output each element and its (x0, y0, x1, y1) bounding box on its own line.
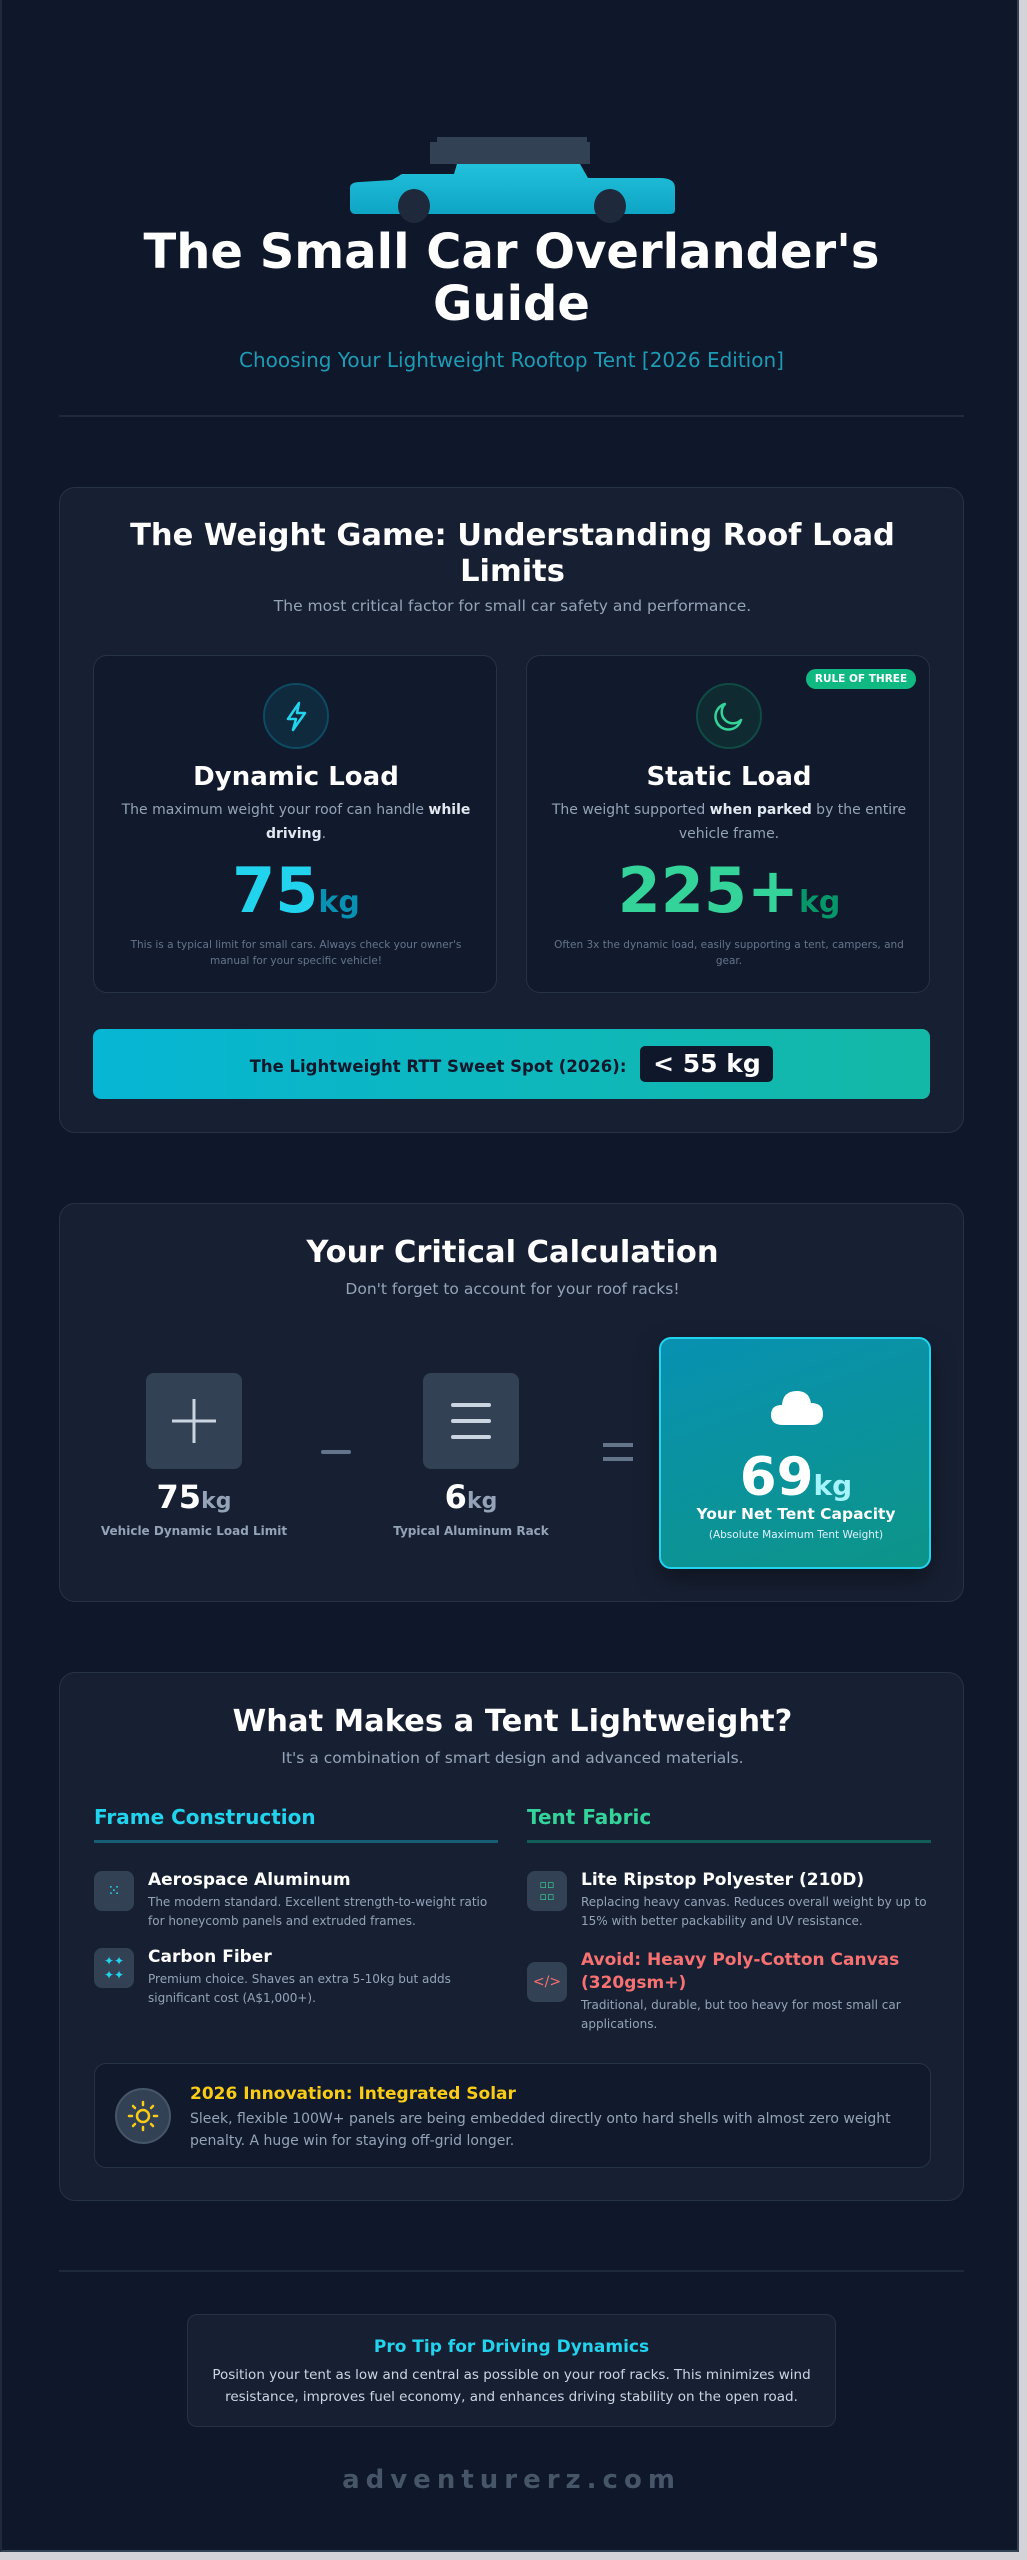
column: tent fabric (527, 1805, 931, 2031)
heading: static load: Static Load (646, 762, 812, 792)
item: aerospace aluminum (94, 1870, 487, 1928)
item: rack (393, 1373, 549, 1538)
callout: integrated solar (94, 2063, 931, 2168)
item: avoid canvas: Avoid: Heavy Poly-Cotton Canvas (320gsm+) (581, 1950, 899, 1993)
stat: 69kg: 69kg (740, 1447, 852, 1508)
icon: carbon: ✦✦ (104, 1954, 124, 1968)
card: static load (526, 655, 930, 993)
footer: brand: adventurerz.com (342, 2465, 681, 2495)
item: avoid canvas: Traditional, durable, but too heavy for most small car applications. (581, 1998, 901, 2031)
pill: < 55 kg: < 55 kg (653, 1049, 761, 1078)
text: dynamic description: The maximum weight your roof can handle while driving. (122, 802, 470, 842)
operator: minus (321, 1450, 351, 1454)
subtitle: Choosing Your Lightweight Rooftop Tent [2026 Edition] (239, 348, 784, 372)
panel: critical calculation (59, 1203, 964, 1602)
item: avoid canvas (527, 1950, 901, 2031)
icon: aluminum (94, 1871, 134, 1911)
note: Often 3x the dynamic load, easily supporting a tent, campers, and gear. (554, 939, 904, 967)
item: rack: 6kg (445, 1478, 497, 1516)
heading: What Makes a Tent Lightweight? (233, 1704, 792, 1739)
subheading: It's a combination of smart design and advanced materials. (281, 1749, 744, 1767)
card: dynamic load (93, 655, 497, 993)
item: aerospace aluminum: Aerospace Aluminum (148, 1870, 351, 1890)
title: Guide (433, 276, 590, 332)
icon: carbon: ✦✦ (104, 1968, 124, 1982)
badge: rule of three (806, 669, 916, 689)
callout: pro tip (187, 2314, 836, 2427)
badge: rule of three: RULE OF THREE (815, 673, 907, 685)
item: ripstop polyester: Lite Ripstop Polyester (210D) (581, 1870, 864, 1890)
icon: code (527, 1962, 567, 2002)
item: ripstop polyester: Replacing heavy canvas. Reduces overall weight by up to 15% with better packability and UV resistance. (581, 1895, 927, 1928)
heading: frame construction: Frame Construction (94, 1805, 316, 1829)
icon: aluminum: ⁙ (107, 1881, 121, 1900)
icon: carbon (94, 1948, 134, 1988)
stat: 225+kg: 225+kg (618, 854, 840, 927)
item: aerospace aluminum: The modern standard. Excellent strength-to-weight ratio for honeycomb panels and extruded frames. (148, 1895, 487, 1928)
title: The Small Car Overlander's (144, 224, 879, 280)
item: vehicle limit: 75kg (157, 1478, 231, 1516)
note: This is a typical limit for small cars. Always check your owner's manual for your specific vehicle! (131, 939, 461, 967)
item: carbon fiber (94, 1947, 451, 2005)
heading: weight game (130, 518, 895, 589)
pill: < 55 kg (640, 1046, 773, 1082)
panel: weight game (59, 487, 964, 1133)
item: ripstop polyester (527, 1870, 927, 1928)
operator: equals (603, 1443, 633, 1461)
text: solar title: 2026 Innovation: Integrated Solar (190, 2084, 516, 2104)
icon: car with rooftop tent (350, 137, 675, 223)
text: solar description: Sleek, flexible 100W+ panels are being embedded directly onto hard shells with almost zero weight penalty. A huge win for staying off-grid longer. (190, 2111, 891, 2149)
text: sweet spot label: The Lightweight RTT Sweet Spot (2026): (250, 1056, 626, 1076)
item: carbon fiber: Carbon Fiber (148, 1947, 272, 1967)
panel: what makes a tent lightweight (59, 1672, 964, 2201)
result card: net capacity: Your Net Tent Capacity (696, 1505, 896, 1523)
heading: critical calculation: Your Critical Calculation (306, 1235, 719, 1270)
icon: plus box (146, 1373, 242, 1469)
heading: tent fabric: Tent Fabric (527, 1805, 651, 1829)
heading: dynamic load: Dynamic Load (193, 762, 399, 792)
text: static description: The weight supported when parked by the entire vehicle frame. (552, 802, 906, 842)
subheading: The most critical factor for small car safety and performance. (274, 597, 751, 615)
callout: sweet spot bar (93, 1029, 930, 1099)
icon: lightning (263, 683, 329, 749)
icon: grid: ▫▫ (540, 1890, 554, 1903)
icon: sun (115, 2088, 171, 2144)
item: carbon fiber: Premium choice. Shaves an extra 5-10kg but adds significant cost (A$1,000+). (148, 1972, 451, 2005)
item: vehicle limit: Vehicle Dynamic Load Limit (101, 1524, 287, 1538)
column: frame construction (94, 1805, 498, 2005)
item: vehicle limit (101, 1373, 287, 1538)
heading: weight game: Limits (460, 554, 565, 589)
icon: cloud (771, 1391, 823, 1425)
title (144, 224, 879, 332)
icon: code: </> (533, 1974, 561, 1990)
icon: rack box (423, 1373, 519, 1469)
stat: 75kg: 75kg (232, 854, 360, 927)
text: pro tip body: Position your tent as low and central as possible on your roof racks. This minimizes wind resistance, improves fuel economy, and enhances driving stability on the open road. (212, 2367, 811, 2405)
icon: moon (696, 683, 762, 749)
icon: grid (527, 1871, 567, 1911)
item: rack: Typical Aluminum Rack (393, 1524, 549, 1538)
subheading: Don't forget to account for your roof racks! (345, 1280, 680, 1298)
result card: net capacity: (Absolute Maximum Tent Weight) (709, 1529, 883, 1541)
result card: net capacity (659, 1337, 931, 1569)
icon: grid: ▫▫ (540, 1878, 554, 1891)
heading: weight game: The Weight Game: Understanding Roof Load (130, 518, 895, 553)
text: pro tip title: Pro Tip for Driving Dynamics (374, 2337, 649, 2357)
